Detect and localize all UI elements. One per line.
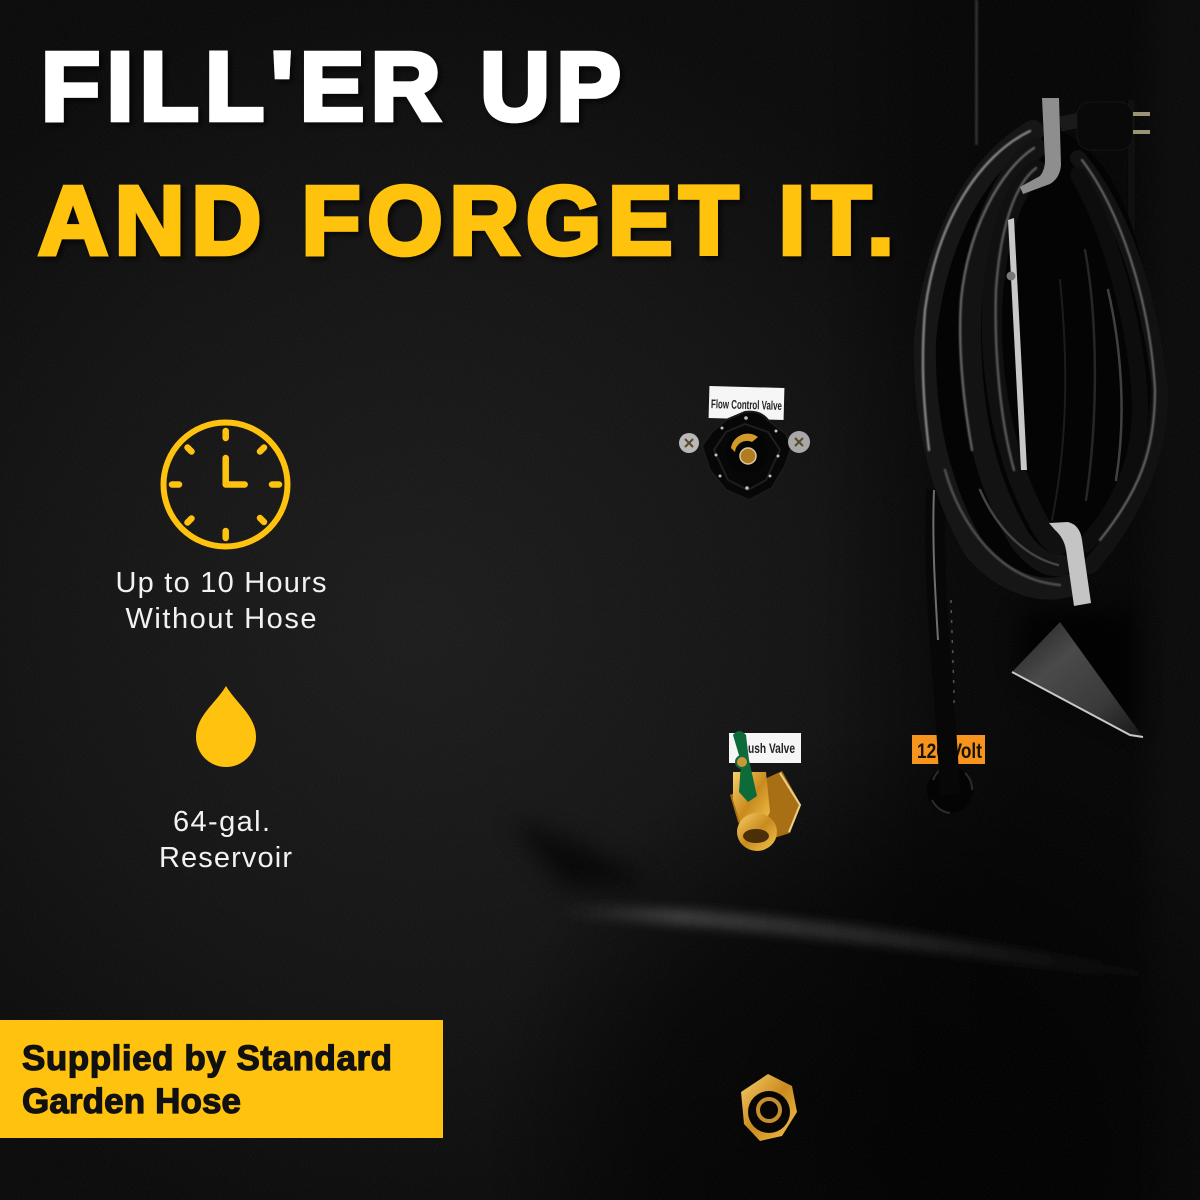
icon: clock: [164, 422, 288, 546]
label: 120 volt: 120 Volt: [917, 740, 982, 763]
text: reservoir: 64-gal.: [173, 806, 270, 838]
title: FILL'ER UP: [41, 32, 621, 141]
title: AND FORGET IT.: [38, 166, 894, 275]
text: up to 10 hours: [116, 567, 326, 635]
icon: brass spigot: [730, 731, 801, 851]
bottom hose fitting: [741, 1074, 797, 1141]
title: [38, 32, 894, 275]
lower hanger strap: [1049, 522, 1091, 606]
plug: [1060, 102, 1150, 150]
icon: valve wheel: [679, 412, 810, 500]
text: up to 10 hours: Without Hose: [126, 603, 316, 635]
grommet and power cord: [927, 490, 973, 813]
callout: supplied by standard garden hose: [0, 1020, 443, 1138]
wall bracket triangle: [1012, 610, 1143, 737]
upper hook: [1020, 98, 1061, 194]
text: reservoir: [159, 806, 292, 874]
coil shadow body: [932, 128, 1152, 592]
lower hanger strip: [1006, 218, 1027, 470]
flow control valve: [679, 386, 810, 500]
text: up to 10 hours: Up to 10 Hours: [116, 567, 326, 599]
label: 120 volt: [912, 735, 985, 764]
text: reservoir: Reservoir: [159, 842, 292, 874]
label: flush valve: ush Valve: [748, 740, 795, 756]
flush valve: [729, 731, 801, 851]
callout: supplied by standard garden hose: Garden Hose: [22, 1082, 241, 1121]
callout: supplied by standard garden hose: Supplied by Standard: [22, 1039, 392, 1078]
coiled power cord: [923, 128, 1160, 592]
label: flow control valve: Flow Control Valve: [711, 397, 782, 413]
icon: water drop: [196, 686, 256, 767]
